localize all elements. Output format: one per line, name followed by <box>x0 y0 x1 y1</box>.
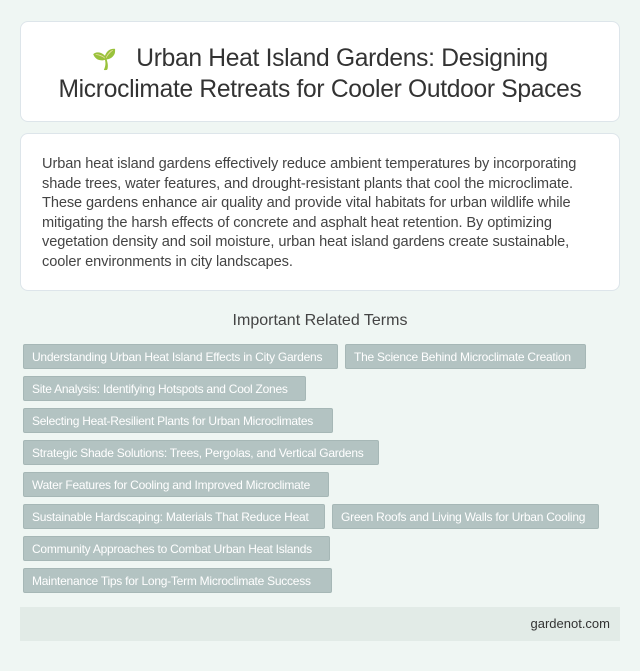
tag: Site Analysis: Identifying Hotspots and Cool Zones <box>32 382 288 396</box>
tag: Community Approaches to Combat Urban Heat Islands <box>32 542 312 556</box>
title: Microclimate Retreats for Cooler Outdoor Spaces <box>58 76 582 103</box>
footer <box>20 607 620 641</box>
tag <box>23 344 338 369</box>
tag: Water Features for Cooling and Improved Microclimate <box>32 478 310 492</box>
tag: Strategic Shade Solutions: Trees, Pergolas, and Vertical Gardens <box>32 446 364 460</box>
description text <box>42 156 576 270</box>
tag <box>345 344 586 369</box>
description text: mitigating the harsh effects of concrete and asphalt heat retention. By optimizing <box>42 214 552 230</box>
header card <box>20 21 620 122</box>
description text: These gardens enhance air quality and provide vital habitats for urban wildlife while <box>42 195 571 211</box>
tag: Selecting Heat-Resilient Plants for Urban Microclimates <box>32 414 313 428</box>
description card <box>20 133 620 291</box>
tag <box>23 408 333 433</box>
tag: Maintenance Tips for Long-Term Microclimate Success <box>32 574 311 588</box>
tag <box>332 504 599 529</box>
related terms heading: Important Related Terms <box>233 312 407 329</box>
tag <box>23 376 306 401</box>
tag <box>23 440 379 465</box>
tag: Understanding Urban Heat Island Effects in City Gardens <box>32 350 322 364</box>
description text: cooler environments in city landscapes. <box>42 254 293 270</box>
description text: vegetation density and soil moisture, urban heat island gardens create sustainable, <box>42 234 569 250</box>
tags <box>23 344 599 593</box>
tag <box>23 536 330 561</box>
tag <box>23 568 332 593</box>
tag: The Science Behind Microclimate Creation <box>354 350 571 364</box>
description text: shade trees, water features, and drought-resistant plants that cool the microclimate. <box>42 176 573 192</box>
title: 🌱 Urban Heat Island Gardens: Designing <box>92 45 548 72</box>
tag: Green Roofs and Living Walls for Urban Cooling <box>341 510 585 524</box>
title <box>58 45 582 103</box>
tag <box>23 504 325 529</box>
tag: Sustainable Hardscaping: Materials That Reduce Heat <box>32 510 309 524</box>
tag <box>23 472 329 497</box>
footer: gardenot.com <box>530 616 610 631</box>
description text: Urban heat island gardens effectively reduce ambient temperatures by incorporating <box>42 156 576 172</box>
